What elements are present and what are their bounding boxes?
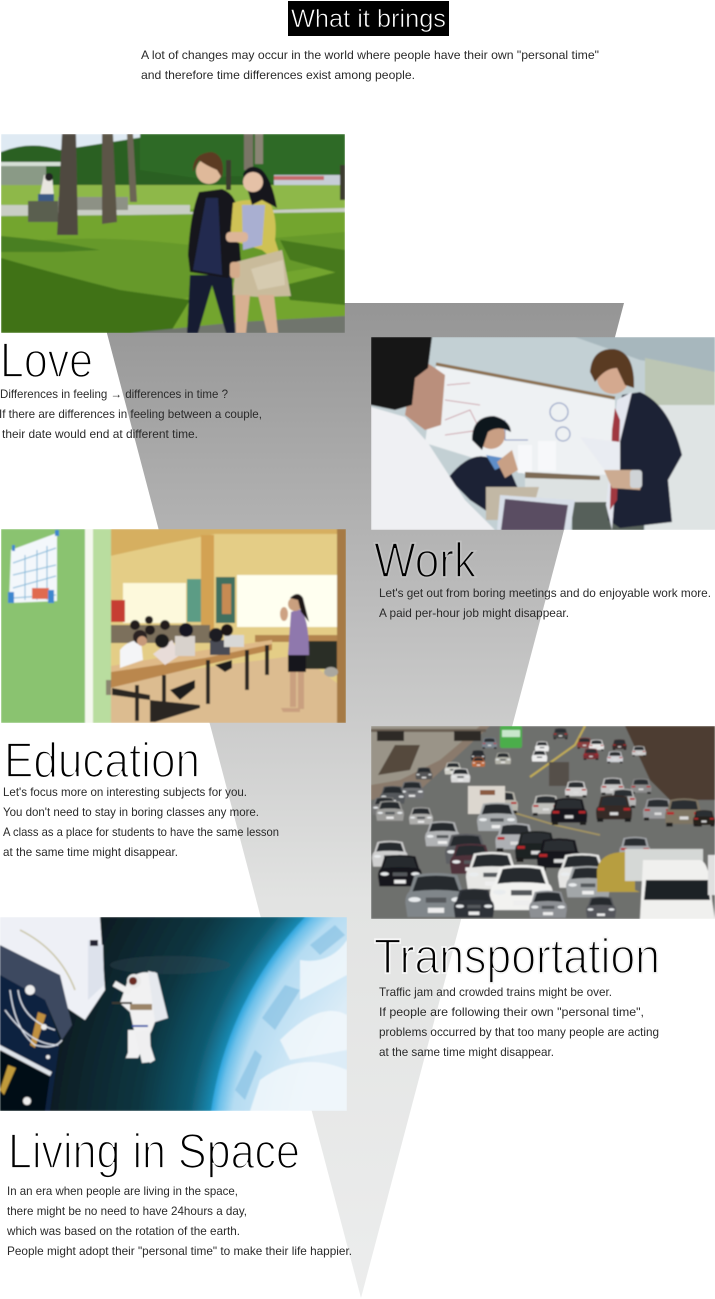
photo: astronaut in space <box>0 917 347 1111</box>
text: Work: A paid per-hour job might disappear. <box>379 606 569 620</box>
text: Transportation: Traffic jam and crowded trains might be over. <box>379 985 612 999</box>
text: Transportation <box>379 985 659 1059</box>
photo: couple walking in a park <box>1 134 345 333</box>
title: What it brings <box>291 5 446 33</box>
text: Education: Let's focus more on interesting subjects for you. <box>3 785 247 799</box>
text: Education: at the same time might disappear. <box>3 845 178 859</box>
background triangle <box>99 303 624 1298</box>
text: Living in Space <box>6 1184 352 1258</box>
text: Education <box>3 785 279 859</box>
text: Living in Space: In an era when people are living in the space, <box>7 1184 238 1198</box>
text: Love: their date would end at different time. <box>2 427 198 441</box>
photo: meeting at a whiteboard <box>371 337 715 530</box>
text: Love: If there are differences in feeling between a couple, <box>0 407 262 421</box>
heading: Work: Work <box>374 534 476 588</box>
text: Education: You don't need to stay in boring classes any more. <box>3 805 259 819</box>
intro text <box>141 48 599 82</box>
intro text: and therefore time differences exist among people. <box>141 68 415 82</box>
text: Transportation: If people are following their own "personal time", <box>379 1005 644 1019</box>
text: Transportation: at the same time might disappear. <box>379 1045 554 1059</box>
text: Work: Let's get out from boring meetings and do enjoyable work more. <box>379 586 711 600</box>
text: Education: A class as a place for students to have the same lesson <box>3 825 279 839</box>
text: Transportation: problems occurred by that too many people are acting <box>379 1025 659 1039</box>
text: Living in Space: which was based on the rotation of the earth. <box>6 1224 240 1238</box>
text: Love: Differences in feeling → differences in time ? <box>0 387 228 401</box>
heading: Living in Space: Living in Space <box>8 1125 300 1179</box>
intro text: A lot of changes may occur in the world where people have their own "personal time" <box>141 48 599 62</box>
text: Work <box>379 586 711 620</box>
heading: Love: Love <box>0 334 93 388</box>
text: Love <box>0 387 262 441</box>
heading: Education: Education <box>4 734 200 788</box>
heading: Transportation: Transportation <box>374 930 660 984</box>
photo: traffic jam <box>371 726 715 919</box>
photo: classroom <box>1 529 346 723</box>
text: Living in Space: there might be no need to have 24hours a day, <box>7 1204 247 1218</box>
text: Living in Space: People might adopt their "personal time" to make their life happier. <box>7 1244 352 1258</box>
